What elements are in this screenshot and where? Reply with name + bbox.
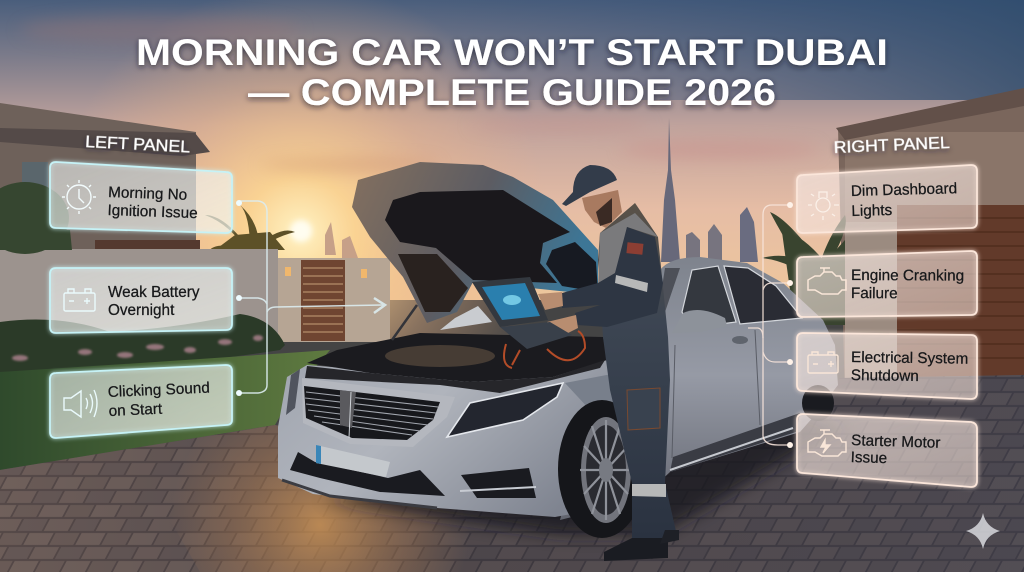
fog bar <box>460 487 536 491</box>
car side body <box>560 257 838 520</box>
licence plate <box>316 445 390 477</box>
tablet frame <box>472 277 548 327</box>
left headlight <box>286 369 300 415</box>
rear boot <box>660 530 679 544</box>
orange cables <box>504 331 585 368</box>
text: Weak Battery <box>108 284 200 301</box>
text: Lights <box>851 202 893 220</box>
front wheel <box>558 400 646 538</box>
panel: right <box>797 165 977 487</box>
text: Overnight <box>108 302 175 319</box>
card: dim dashboard lights <box>797 165 977 233</box>
connectors: right <box>748 205 790 445</box>
headlight <box>447 383 563 437</box>
icon: engine <box>808 268 846 294</box>
text: Shutdown <box>851 367 919 385</box>
car <box>278 162 850 538</box>
windshield sliver <box>660 268 680 312</box>
open hood <box>352 162 598 323</box>
icon: bulb <box>808 192 839 220</box>
mechanic <box>538 165 679 561</box>
text: Morning No <box>108 184 187 204</box>
connectors and arrow: left <box>239 201 385 393</box>
title: — COMPLETE GUIDE 2026 <box>248 72 776 113</box>
right palm <box>762 212 846 325</box>
rear wheel <box>802 385 834 421</box>
hood blue rib recess <box>546 242 598 292</box>
driveway sunset reflection <box>130 425 480 572</box>
wall near gate <box>278 258 390 342</box>
hood rear recess <box>398 254 468 312</box>
driveway tint <box>0 375 1024 572</box>
sun <box>290 220 312 242</box>
upper right navy sky <box>420 0 1024 100</box>
tablet screen <box>482 283 540 320</box>
mirror <box>672 310 727 333</box>
boundary wall <box>0 249 278 341</box>
beard <box>596 198 612 226</box>
pocket panel <box>627 388 660 430</box>
icon: battery <box>808 352 838 373</box>
text: Clicking Sound <box>107 380 210 401</box>
door handle <box>732 336 748 344</box>
connector dots: left <box>236 200 242 396</box>
boots <box>604 538 668 561</box>
neck and face <box>582 190 622 228</box>
panel: left <box>50 162 232 438</box>
card: weak battery overnight <box>50 268 232 333</box>
card: clicking sound on start <box>50 365 232 438</box>
right panel heading: RIGHT PANEL <box>833 134 950 157</box>
icon: clock <box>62 180 96 214</box>
clouds <box>20 16 820 171</box>
door seam <box>672 330 760 458</box>
lawn <box>0 350 330 470</box>
shoulder panel <box>598 213 658 290</box>
fender shade <box>565 372 630 430</box>
icon: sparkle watermark <box>966 513 1000 549</box>
card: morning no ignition issue <box>50 162 232 233</box>
shoulder badge <box>626 242 643 255</box>
reflective stripes <box>615 275 666 497</box>
grille <box>302 378 455 447</box>
hood black seal <box>305 360 605 393</box>
shrub left <box>0 182 72 254</box>
engine cover <box>385 345 495 367</box>
lower chrome lip <box>282 480 437 508</box>
sky <box>0 0 1024 300</box>
gate <box>301 260 345 341</box>
flowers <box>12 335 263 361</box>
diagnostic tablet <box>472 277 585 368</box>
sill chrome <box>670 428 793 470</box>
title <box>136 32 888 113</box>
flower hedge <box>0 314 285 372</box>
text: Starter Motor <box>851 432 941 452</box>
text: Dim Dashboard <box>851 180 957 200</box>
hands <box>538 292 578 336</box>
windshield glimpse <box>440 306 492 330</box>
engine bay <box>307 333 607 382</box>
keyboard <box>500 322 572 349</box>
card: engine cranking failure <box>797 251 977 317</box>
text: on Start <box>108 401 163 420</box>
overalls torso and legs <box>598 203 678 540</box>
cap <box>562 165 617 206</box>
card: electrical system shutdown <box>797 333 977 399</box>
rocker sill <box>670 413 800 472</box>
text: Electrical System <box>851 349 968 368</box>
hood inner <box>385 190 570 283</box>
icon: engine with bolt <box>808 430 846 456</box>
icon: speaker <box>64 390 97 417</box>
text: Ignition Issue <box>107 202 198 222</box>
left panel heading: LEFT PANEL <box>85 133 191 156</box>
windows <box>682 266 802 328</box>
left house <box>0 103 210 252</box>
car front body <box>278 358 640 517</box>
lower air intake <box>290 452 445 496</box>
card: starter motor issue <box>797 414 977 487</box>
city skyline <box>325 118 758 262</box>
paved driveway <box>0 375 1024 572</box>
sun glow <box>30 0 570 340</box>
hood strut <box>392 305 417 340</box>
left palm <box>205 205 295 256</box>
title: MORNING CAR WON’T START DUBAI <box>136 32 888 73</box>
connector dots: right <box>787 202 793 448</box>
ground shadow <box>320 415 850 535</box>
right air intake <box>461 468 536 498</box>
sleeve <box>562 227 663 327</box>
text: Failure <box>851 285 898 302</box>
icon: battery <box>64 289 95 311</box>
text: Engine Cranking <box>851 267 964 285</box>
right house <box>836 88 1024 400</box>
wall lamps <box>285 267 367 278</box>
text: Issue <box>850 449 887 467</box>
screen glow element <box>503 295 521 305</box>
